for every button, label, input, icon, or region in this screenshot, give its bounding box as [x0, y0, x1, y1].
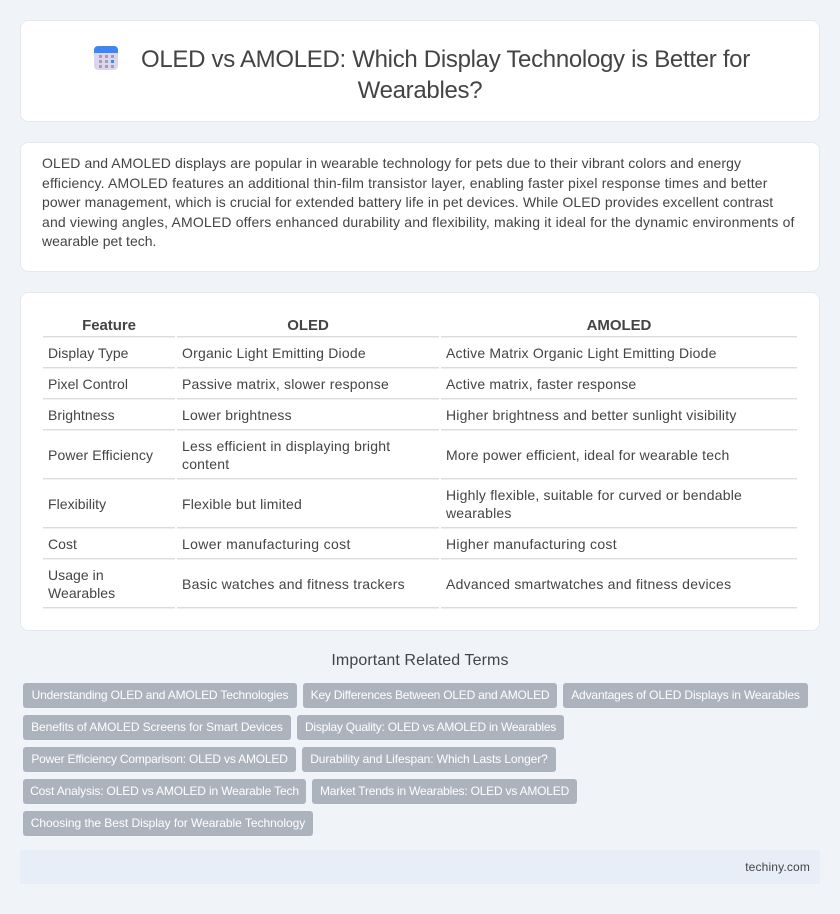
- row: power efficiency: content: [182, 456, 229, 472]
- intro paragraph: power management, which is crucial for extended battery life in pet devices. While OLED provides excellent contrast: [42, 194, 773, 210]
- intro paragraph: efficiency. AMOLED features an additional thin-film transistor layer, enabling faster pixel response times and better: [42, 175, 768, 191]
- row: cost: [48, 536, 617, 552]
- title: Wearables?: [358, 77, 482, 104]
- row: flexibility: Highly flexible, suitable for curved or bendable: [446, 487, 742, 503]
- row: cost: Cost: [48, 536, 77, 552]
- related terms tags: Key Differences Between OLED and AMOLED: [311, 688, 549, 702]
- row: brightness: [48, 407, 737, 423]
- comparison table: [43, 317, 797, 609]
- row: usage in wearables: Basic watches and fitness trackers: [182, 576, 405, 592]
- intro paragraph: OLED and AMOLED displays are popular in wearable technology for pets due to their vibrant colors and energy: [42, 155, 741, 171]
- row: flexibility: wearables: [446, 505, 512, 521]
- row: power efficiency: More power efficient, ideal for wearable tech: [446, 447, 729, 463]
- row: cost: Higher manufacturing cost: [446, 536, 617, 552]
- row: usage in wearables: Usage in: [48, 567, 104, 583]
- related terms tags: Power Efficiency Comparison: OLED vs AMOLED: [31, 752, 288, 766]
- related terms tags: Choosing the Best Display for Wearable Technology: [31, 816, 305, 830]
- related terms tags: Understanding OLED and AMOLED Technologies: [32, 688, 288, 702]
- row: power efficiency: [48, 438, 729, 472]
- intro paragraph: [42, 155, 795, 249]
- row: display type: Display Type: [48, 345, 128, 361]
- row: pixel control: Active matrix, faster response: [446, 376, 636, 392]
- related terms heading: Important Related Terms: [331, 652, 509, 669]
- row: brightness: Brightness: [48, 407, 115, 423]
- column headers: AMOLED: [587, 317, 651, 334]
- intro paragraph: and viewing angles, AMOLED offers enhanced durability and flexibility, making it ideal for the dynamic environments of: [42, 214, 795, 230]
- footer bar: [20, 850, 820, 884]
- row: cost: Lower manufacturing cost: [182, 536, 351, 552]
- row: power efficiency: Less efficient in displaying bright: [182, 438, 390, 454]
- column headers: OLED: [287, 317, 329, 334]
- related terms tags: Advantages of OLED Displays in Wearables: [571, 688, 800, 702]
- footer site name: techiny.com: [745, 860, 810, 874]
- related terms tags: Durability and Lifespan: Which Lasts Longer?: [310, 752, 548, 766]
- related terms tags: Benefits of AMOLED Screens for Smart Devices: [31, 720, 283, 734]
- row: flexibility: [48, 487, 742, 521]
- title: [141, 46, 750, 104]
- row: display type: Organic Light Emitting Diode: [182, 345, 366, 361]
- row: brightness: Higher brightness and better sunlight visibility: [446, 407, 737, 423]
- row: pixel control: [48, 376, 636, 392]
- row: display type: [48, 345, 717, 361]
- related terms tags: Market Trends in Wearables: OLED vs AMOLED: [320, 784, 569, 798]
- comparison table panel: [20, 292, 820, 631]
- row: power efficiency: Power Efficiency: [48, 447, 153, 463]
- column headers: [82, 317, 651, 334]
- row: display type: Active Matrix Organic Light Emitting Diode: [446, 345, 717, 361]
- column headers: Feature: [82, 317, 136, 334]
- header panel: [20, 20, 820, 122]
- row: flexibility: Flexible but limited: [182, 496, 302, 512]
- row: usage in wearables: Wearables: [48, 585, 115, 601]
- related terms tags: Display Quality: OLED vs AMOLED in Wearables: [305, 720, 556, 734]
- related terms tags: Cost Analysis: OLED vs AMOLED in Wearable Tech: [30, 784, 299, 798]
- row: flexibility: Flexibility: [48, 496, 106, 512]
- related terms tags: [23, 683, 808, 836]
- row: brightness: Lower brightness: [182, 407, 292, 423]
- row: pixel control: Pixel Control: [48, 376, 128, 392]
- intro text panel: [20, 142, 820, 272]
- row: usage in wearables: [48, 567, 731, 601]
- row: pixel control: Passive matrix, slower response: [182, 376, 389, 392]
- intro paragraph: wearable pet tech.: [42, 233, 156, 249]
- title: OLED vs AMOLED: Which Display Technology is Better for: [141, 46, 750, 73]
- icon: calendar grid: [94, 46, 118, 70]
- row: usage in wearables: Advanced smartwatches and fitness devices: [446, 576, 731, 592]
